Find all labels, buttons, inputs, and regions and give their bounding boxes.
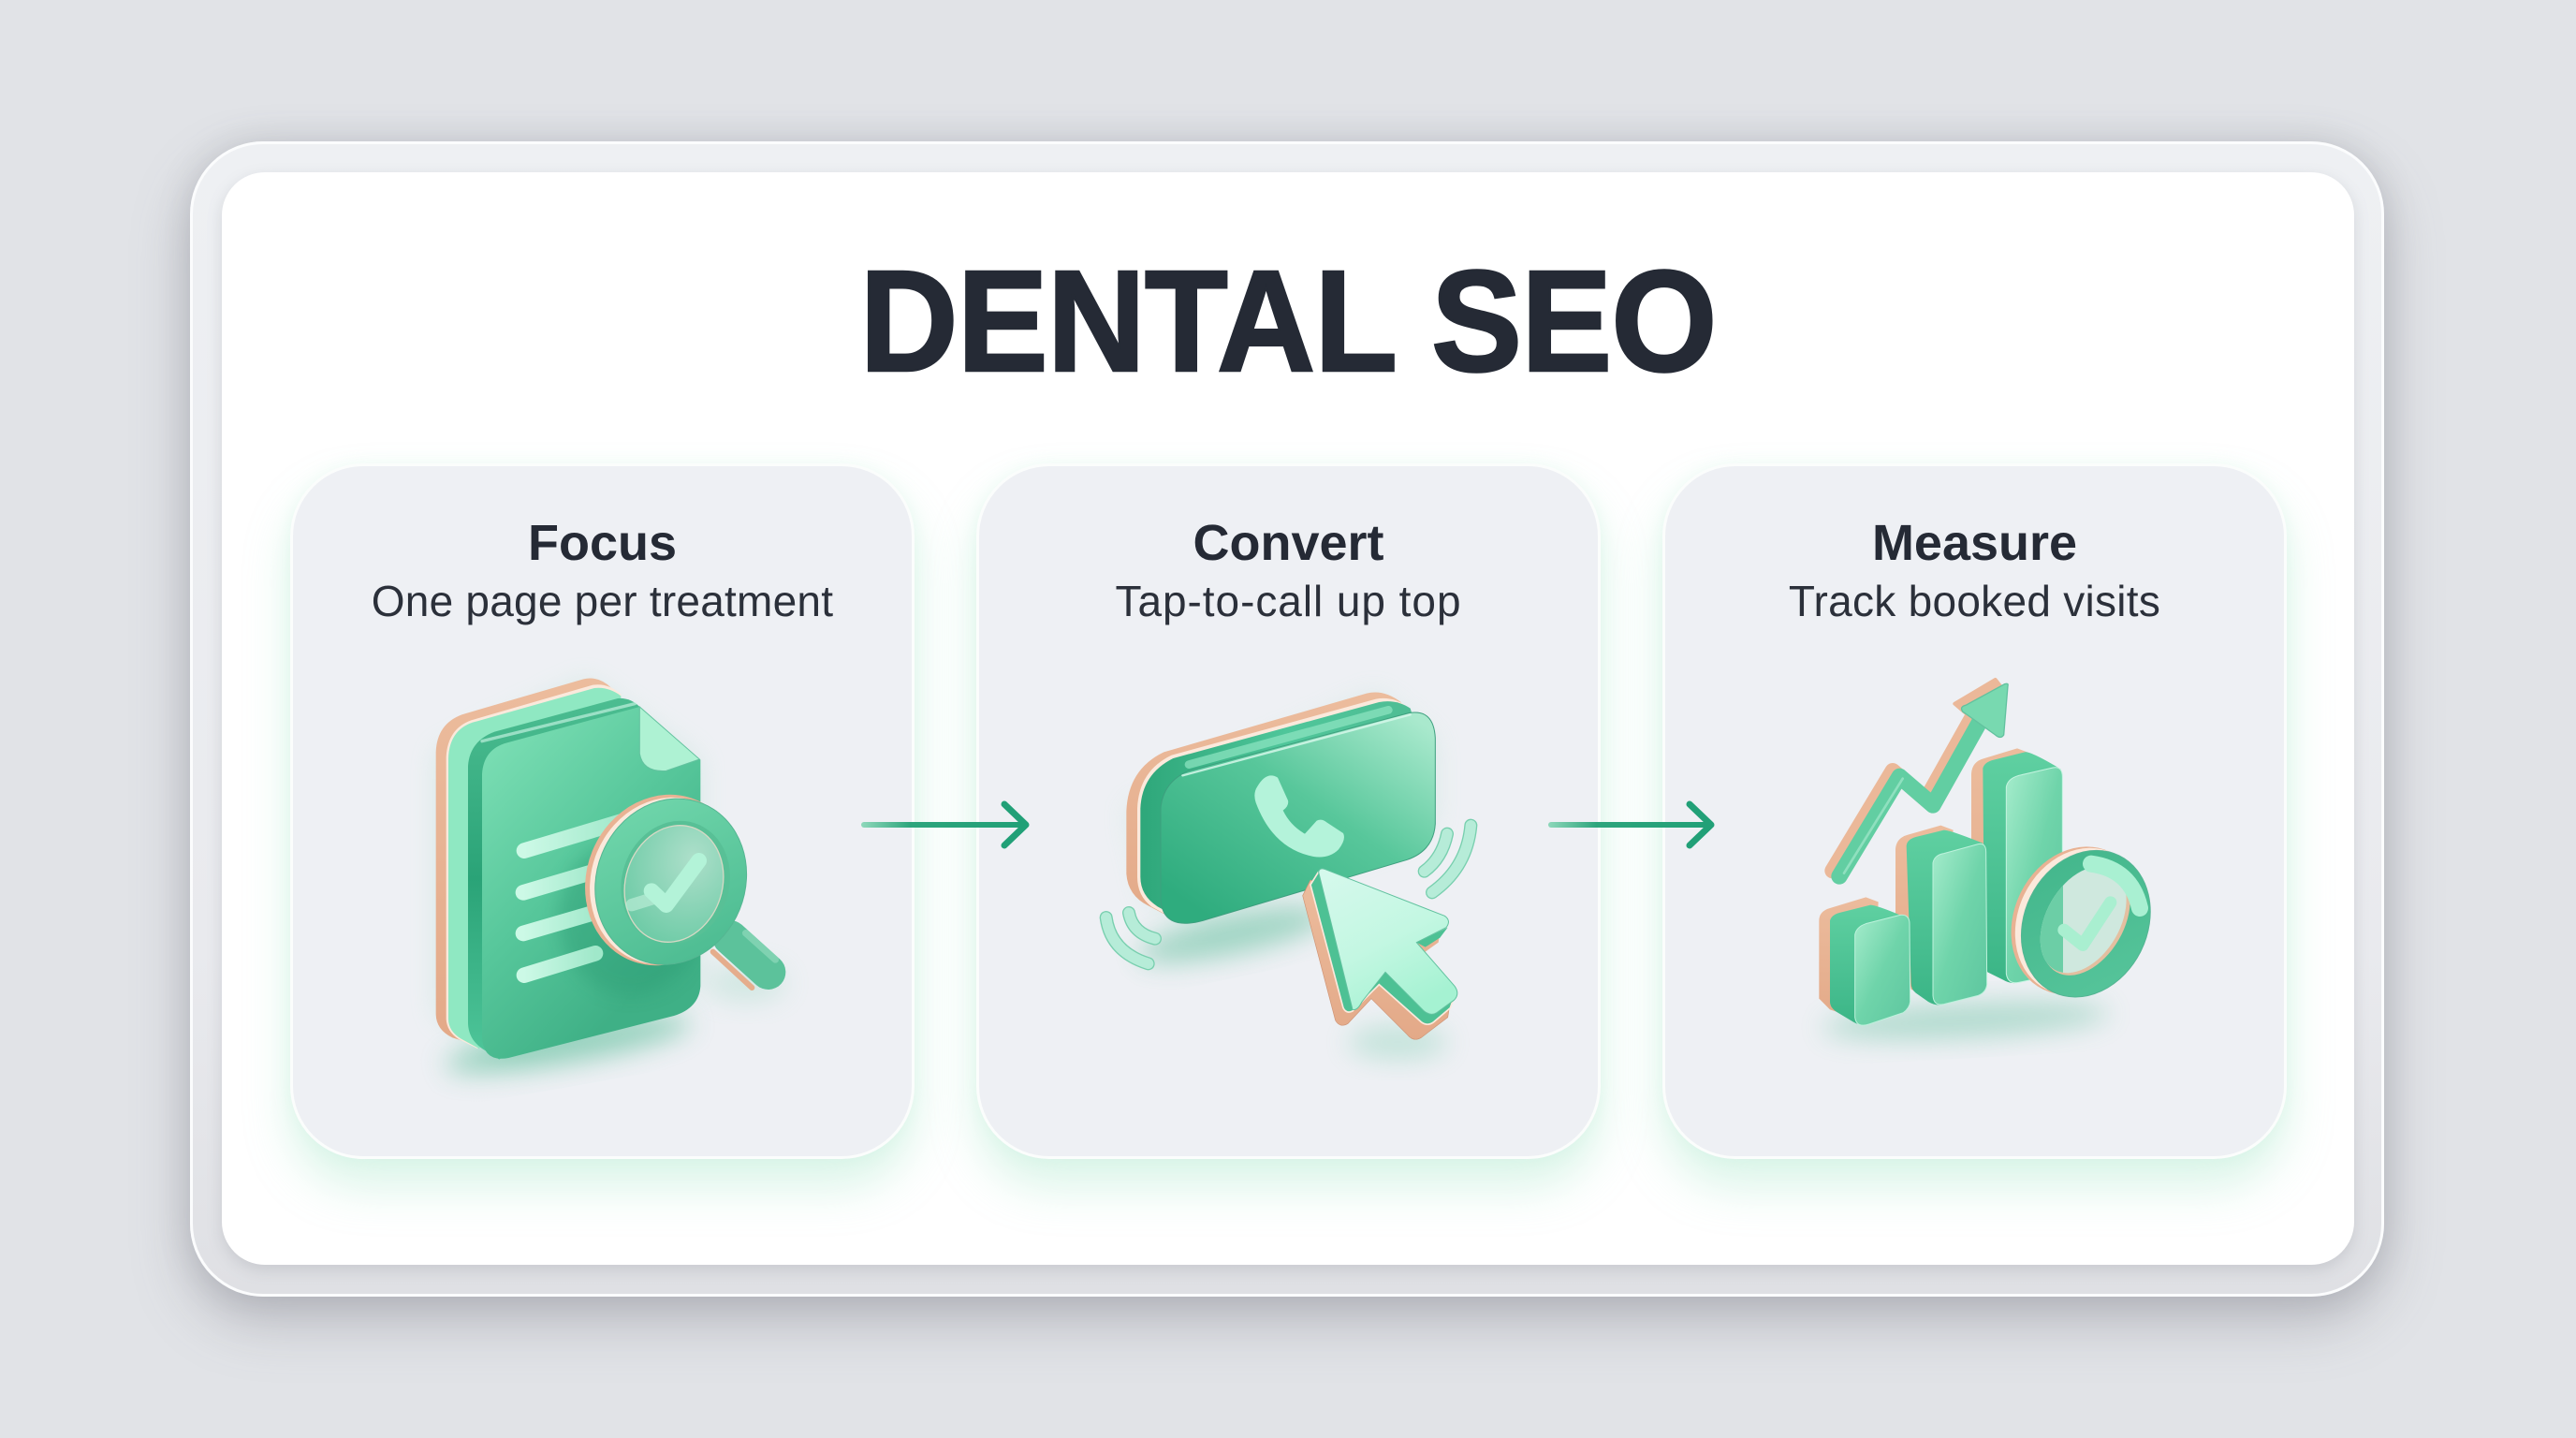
highlight on top edge: [482, 704, 635, 741]
cursor shadow: [1348, 1025, 1448, 1060]
check mark: [651, 860, 699, 905]
arcs fill: [1106, 826, 1471, 963]
cursor face: [1319, 869, 1457, 1014]
button side: [1140, 701, 1432, 924]
cursor green layer: [1310, 873, 1455, 1024]
handle glow: [705, 964, 786, 1002]
badge inner rim: [2023, 850, 2148, 991]
lens: [609, 813, 739, 955]
cursor peach layer: [1303, 880, 1450, 1039]
text: convert description: Tap-to-call up top: [1116, 577, 1461, 625]
badge highlight arc: [2091, 864, 2140, 908]
signal arcs: [1106, 826, 1471, 963]
badge ring: [1998, 829, 2174, 1019]
bar seen through lens: [2041, 886, 2063, 973]
face top highlight: [1182, 714, 1411, 775]
heading: convert: Convert: [1193, 515, 1384, 571]
icon: call button with cursor: [1099, 693, 1477, 1070]
ring: [570, 776, 771, 988]
magnifier: [560, 770, 775, 990]
ring inner edge: [606, 807, 746, 959]
text: measure description: Track booked visits: [1789, 577, 2160, 625]
button peach layer: [1126, 693, 1432, 924]
rising arrow: [1833, 680, 2008, 876]
ground shadow: [1822, 996, 2110, 1045]
arrow head: [1962, 683, 2008, 738]
inner white panel: [222, 172, 2354, 1265]
icon: bar chart with check: [1819, 678, 2151, 1052]
phone glyph: [1254, 775, 1344, 857]
cursor wing peach: [1416, 933, 1440, 952]
page fold: [639, 707, 699, 770]
panel: convert: [976, 463, 1601, 1159]
panel: measure: [1662, 463, 2287, 1159]
bar 1: [1819, 897, 1910, 1025]
arrow: focus to convert: [861, 801, 1030, 848]
outer frame panel: [190, 141, 2384, 1297]
title: DENTAL SEO: [859, 241, 1717, 402]
cursor: [1303, 869, 1457, 1039]
button shadow: [1134, 896, 1331, 974]
heading: focus: Focus: [528, 515, 677, 571]
text lines: [523, 821, 624, 976]
doc glow: [436, 679, 700, 1058]
button glow: [1126, 692, 1435, 920]
check badge: [2011, 846, 2151, 998]
handle: [730, 938, 768, 972]
button side highlight: [1189, 710, 1388, 765]
panel: focus: [290, 463, 915, 1159]
ground shadow: [442, 1003, 695, 1085]
arrow peach layer: [1833, 711, 1976, 871]
magnifier shadow on page: [558, 849, 680, 990]
peach back layer: [436, 679, 618, 1046]
heading: measure: Measure: [1872, 515, 2077, 571]
handle peach: [713, 952, 752, 988]
text: focus description: One page per treatment: [372, 577, 833, 625]
button face: [1161, 712, 1435, 923]
document face: [482, 707, 700, 1059]
cursor wing green: [1416, 928, 1448, 947]
bar 3: [1971, 748, 2062, 983]
arrow line: [1839, 716, 1983, 876]
mid green layer: [468, 698, 655, 1060]
rim peach: [560, 770, 767, 990]
light mint layer: [446, 684, 624, 1049]
line behind lens: [632, 897, 657, 905]
badge lens: [2023, 851, 2144, 988]
check mark: [2064, 902, 2111, 945]
arrow: convert to measure: [1548, 801, 1715, 848]
bar 2: [1895, 826, 1987, 1005]
badge peach rim: [1987, 825, 2166, 1017]
arcs outline: [1106, 826, 1471, 963]
icon: document with magnifier: [432, 678, 787, 1090]
